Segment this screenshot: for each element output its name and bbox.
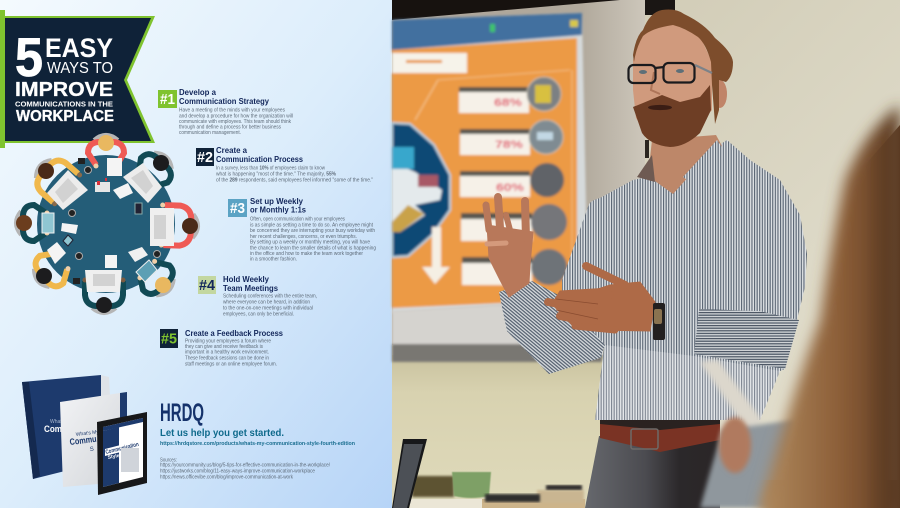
- laptop and desk items: [392, 439, 585, 508]
- glasses: [628, 63, 694, 83]
- projector screen: [392, 13, 587, 313]
- body 3: her recent challenges, concerns, or even triumphs.: [250, 234, 357, 240]
- heading 2: [216, 145, 303, 164]
- nose: [651, 72, 660, 94]
- person 2 top right: [131, 145, 180, 194]
- body 5: important in a healthy work environment.: [185, 350, 269, 356]
- table: [37, 155, 175, 293]
- lower right hand: [548, 266, 655, 331]
- booklet: S: [90, 447, 94, 453]
- ear: [713, 80, 727, 108]
- body 3: in the office and how to make the team work together: [250, 251, 363, 257]
- body 4: where everyone can be heard, in addition: [223, 300, 310, 306]
- badge 4: #4: [199, 277, 216, 294]
- badge 1: #1: [160, 91, 175, 108]
- bar 1: 68%: [494, 97, 522, 109]
- step 5: [160, 328, 283, 368]
- heading 3: or Monthly 1:1s: [250, 204, 306, 214]
- body 3: in a smoother fashion.: [250, 256, 297, 262]
- badge 2: #2: [197, 149, 213, 166]
- person 3 right: [159, 202, 199, 249]
- heading 2: Communication Process: [216, 154, 303, 164]
- eyes: [639, 69, 684, 74]
- person 5 bottom: [82, 278, 126, 313]
- body 1: through and define a process for better business: [179, 124, 281, 130]
- binder: Com: [44, 424, 62, 435]
- booklet: [60, 393, 120, 487]
- heading 1: Communication Strategy: [179, 96, 269, 106]
- call to action: [160, 428, 355, 447]
- step 1: [158, 87, 293, 136]
- tablet: Style: [107, 453, 120, 461]
- title text: WAYS TO: [47, 60, 113, 77]
- body 4: Scheduling conferences with the entire team,: [223, 294, 317, 300]
- booklet: What's My: [76, 429, 100, 438]
- title text: COMMUNICATIONS IN THE: [15, 100, 113, 108]
- body 3: is as simple as setting a time to do so. An employee might: [250, 222, 374, 228]
- body 4: employees, can only be beneficial.: [223, 312, 294, 318]
- title text: [15, 26, 114, 125]
- belt: [600, 420, 720, 452]
- person 8 top left: [26, 150, 83, 207]
- title text: WORKPLACE: [16, 108, 114, 125]
- beard: [633, 85, 711, 147]
- bar 3: 60%: [496, 182, 524, 194]
- hair: [633, 10, 733, 124]
- body 2: of the 289 respondents, said employees feel informed "some of the time.": [216, 178, 373, 184]
- body 3: Often, open communication with your employees: [250, 216, 345, 222]
- binder: What's My: [50, 419, 74, 425]
- sources: https://yourcommunity.us/blog/5-tips-for-effective-communication-in-the-workplace/: [160, 462, 331, 468]
- call to action: https://hrdqstore.com/products/whats-my-communication-style-fourth-edition: [160, 441, 355, 447]
- hair lower and right edge fill: [762, 125, 900, 508]
- arrow on screen: [422, 227, 450, 284]
- tablet: [97, 412, 147, 495]
- title text: EASY: [45, 33, 113, 63]
- shirt: [499, 140, 807, 420]
- blurred foreground person: [700, 105, 900, 508]
- booklet: Commu: [69, 434, 97, 447]
- projector housing: [392, 303, 602, 362]
- body 3: By setting up a weekly or monthly meeting, you will have: [250, 240, 370, 246]
- body 3: the chance to learn the smaller details of what is happening: [250, 246, 376, 252]
- body 1: communicate with employees. This team should think: [179, 119, 291, 125]
- face: [633, 24, 712, 140]
- title text: IMPROVE: [15, 79, 113, 101]
- body 5: These feedback sessions can be done in: [185, 356, 269, 362]
- panel: infographic: [0, 0, 392, 508]
- octagon graphic: [392, 123, 450, 257]
- laptops and papers on table: [42, 158, 174, 292]
- badge 3: #3: [230, 200, 245, 217]
- step 2: [196, 145, 373, 184]
- body 1: communication management.: [179, 130, 241, 136]
- mouth: [648, 105, 672, 110]
- sources: https://justworks.com/blog/11-easy-ways-improve-communication-workplace: [160, 468, 315, 474]
- panel: photo of presenter: [392, 0, 900, 508]
- logo: HRDQ: HRDQ: [160, 399, 204, 427]
- heading 3: Set up Weekly: [250, 196, 303, 206]
- heading 1: Develop a: [179, 87, 216, 97]
- round table illustration: [16, 135, 199, 313]
- body 5: staff meetings or an online employee forum.: [185, 362, 277, 368]
- heading 5: Create a Feedback Process: [185, 328, 283, 338]
- bar 2: 78%: [495, 139, 523, 151]
- step 4: [198, 274, 317, 318]
- person 7 left: [16, 205, 50, 241]
- product images: [22, 375, 147, 495]
- body 1: [179, 108, 293, 136]
- title text: 5: [15, 26, 43, 88]
- title banner: [0, 10, 155, 148]
- bar 2: [460, 120, 563, 155]
- bar 4: [461, 204, 567, 241]
- head: [628, 10, 733, 147]
- binder: [22, 375, 127, 479]
- heading 4: Team Meetings: [223, 283, 278, 293]
- body 4: [223, 294, 317, 318]
- sources: Sources:: [160, 458, 177, 464]
- heading 3: [250, 196, 306, 214]
- heading 4: Hold Weekly: [223, 274, 269, 284]
- sources: https://news.officevibe.com/blog/improve-communication-at-work: [160, 474, 293, 480]
- neck: [648, 135, 722, 194]
- body 1: Have a meeting of the minds with your employees: [179, 108, 285, 114]
- back wall: [392, 0, 900, 508]
- tablet: Communication: [105, 442, 140, 456]
- bar 3: [460, 163, 564, 197]
- person 4 bottom right: [132, 254, 182, 303]
- trousers: [585, 436, 720, 508]
- body 1: and develop a procedure for how the organization will: [179, 114, 293, 120]
- call to action: Let us help you get started.: [160, 428, 284, 439]
- bar 5: [462, 249, 567, 285]
- body 5: Providing your employees a forum where: [185, 338, 271, 344]
- watch: [653, 303, 665, 340]
- heading 1: [179, 87, 269, 106]
- body 4: to the one-on-one meetings with individual: [223, 306, 313, 312]
- heading 2: Create a: [216, 145, 247, 155]
- badge 5: #5: [161, 330, 177, 348]
- person 1 top: [88, 135, 124, 168]
- raised left hand: [486, 197, 533, 297]
- bar 1: [459, 77, 561, 113]
- person 6 bottom left: [26, 246, 75, 295]
- body 3: [250, 216, 376, 262]
- body 5: [185, 338, 277, 368]
- sources: [160, 458, 331, 480]
- step 3: [228, 196, 376, 262]
- body 2: [216, 166, 373, 184]
- body 2: In a survey, less than 10% of employees claim to know: [216, 166, 325, 172]
- body 2: what is happening "most of the time." The majority, 55%: [216, 172, 337, 178]
- collar: [633, 140, 726, 206]
- body 5: they can give and receive feedback is: [185, 344, 263, 350]
- body 3: be concerned they are interrupting your busy workday with: [250, 228, 375, 234]
- heading 4: [223, 274, 278, 293]
